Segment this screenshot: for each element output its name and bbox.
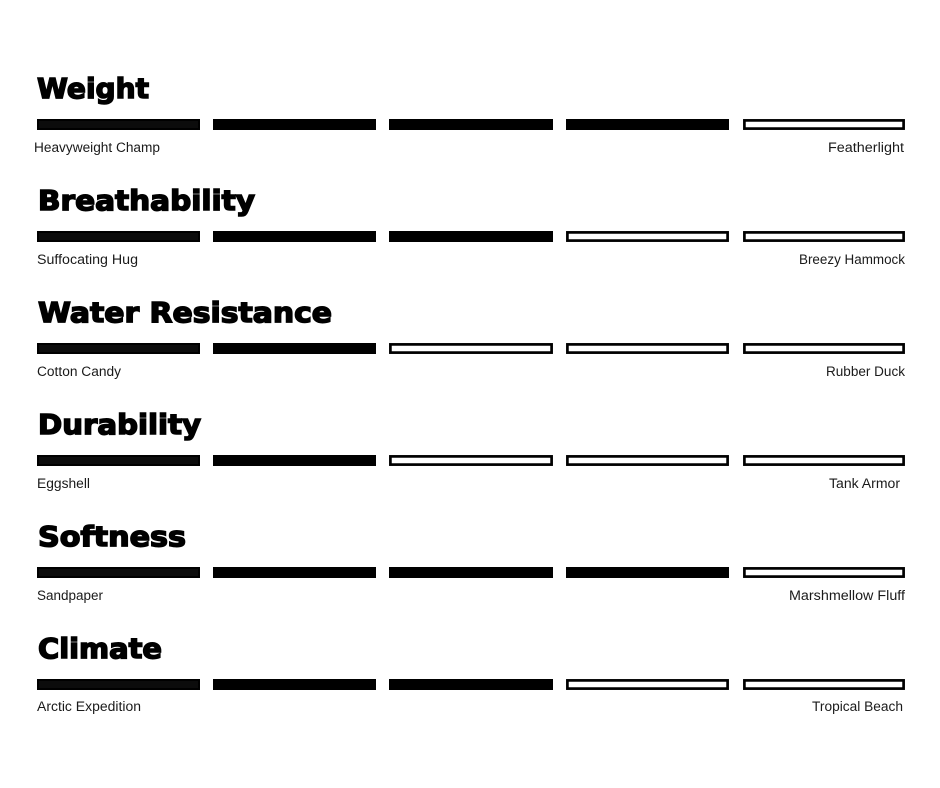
heading: weight: Weight (37, 72, 149, 105)
label: softness high: Marshmellow Fluff (789, 588, 905, 603)
scale: breathability, 3 of 5 (38, 231, 904, 242)
heading: breathability: Breathability (38, 184, 255, 217)
heading: water resistance: Water Resistance (38, 296, 332, 329)
panel: durability (37, 408, 904, 491)
label: climate high: Tropical Beach (812, 699, 903, 714)
scale: climate, 3 of 5 (38, 679, 904, 690)
heading: softness: Softness (38, 520, 186, 553)
scale: softness, 4 of 5 (38, 567, 904, 578)
label: breathability low: Suffocating Hug (37, 252, 138, 267)
label: durability low: Eggshell (37, 476, 90, 491)
panel: climate (37, 632, 904, 714)
panel: weight (34, 72, 904, 155)
scale: water resistance, 2 of 5 (38, 343, 904, 354)
label: climate low: Arctic Expedition (37, 699, 141, 714)
label: weight low: Heavyweight Champ (34, 140, 160, 155)
panel: breathability (37, 184, 905, 267)
label: water resistance high: Rubber Duck (826, 364, 905, 379)
label: durability high: Tank Armor (829, 476, 901, 491)
scale: weight, 4 of 5 (38, 119, 904, 130)
label: softness low: Sandpaper (37, 588, 103, 603)
panel: water resistance (37, 296, 905, 379)
label: water resistance low: Cotton Candy (37, 364, 121, 379)
heading: durability: Durability (38, 408, 201, 441)
panel: softness (37, 520, 905, 603)
heading: climate: Climate (38, 632, 162, 665)
label: breathability high: Breezy Hammock (799, 252, 905, 267)
label: weight high: Featherlight (828, 140, 904, 155)
scale: durability, 2 of 5 (38, 455, 904, 466)
